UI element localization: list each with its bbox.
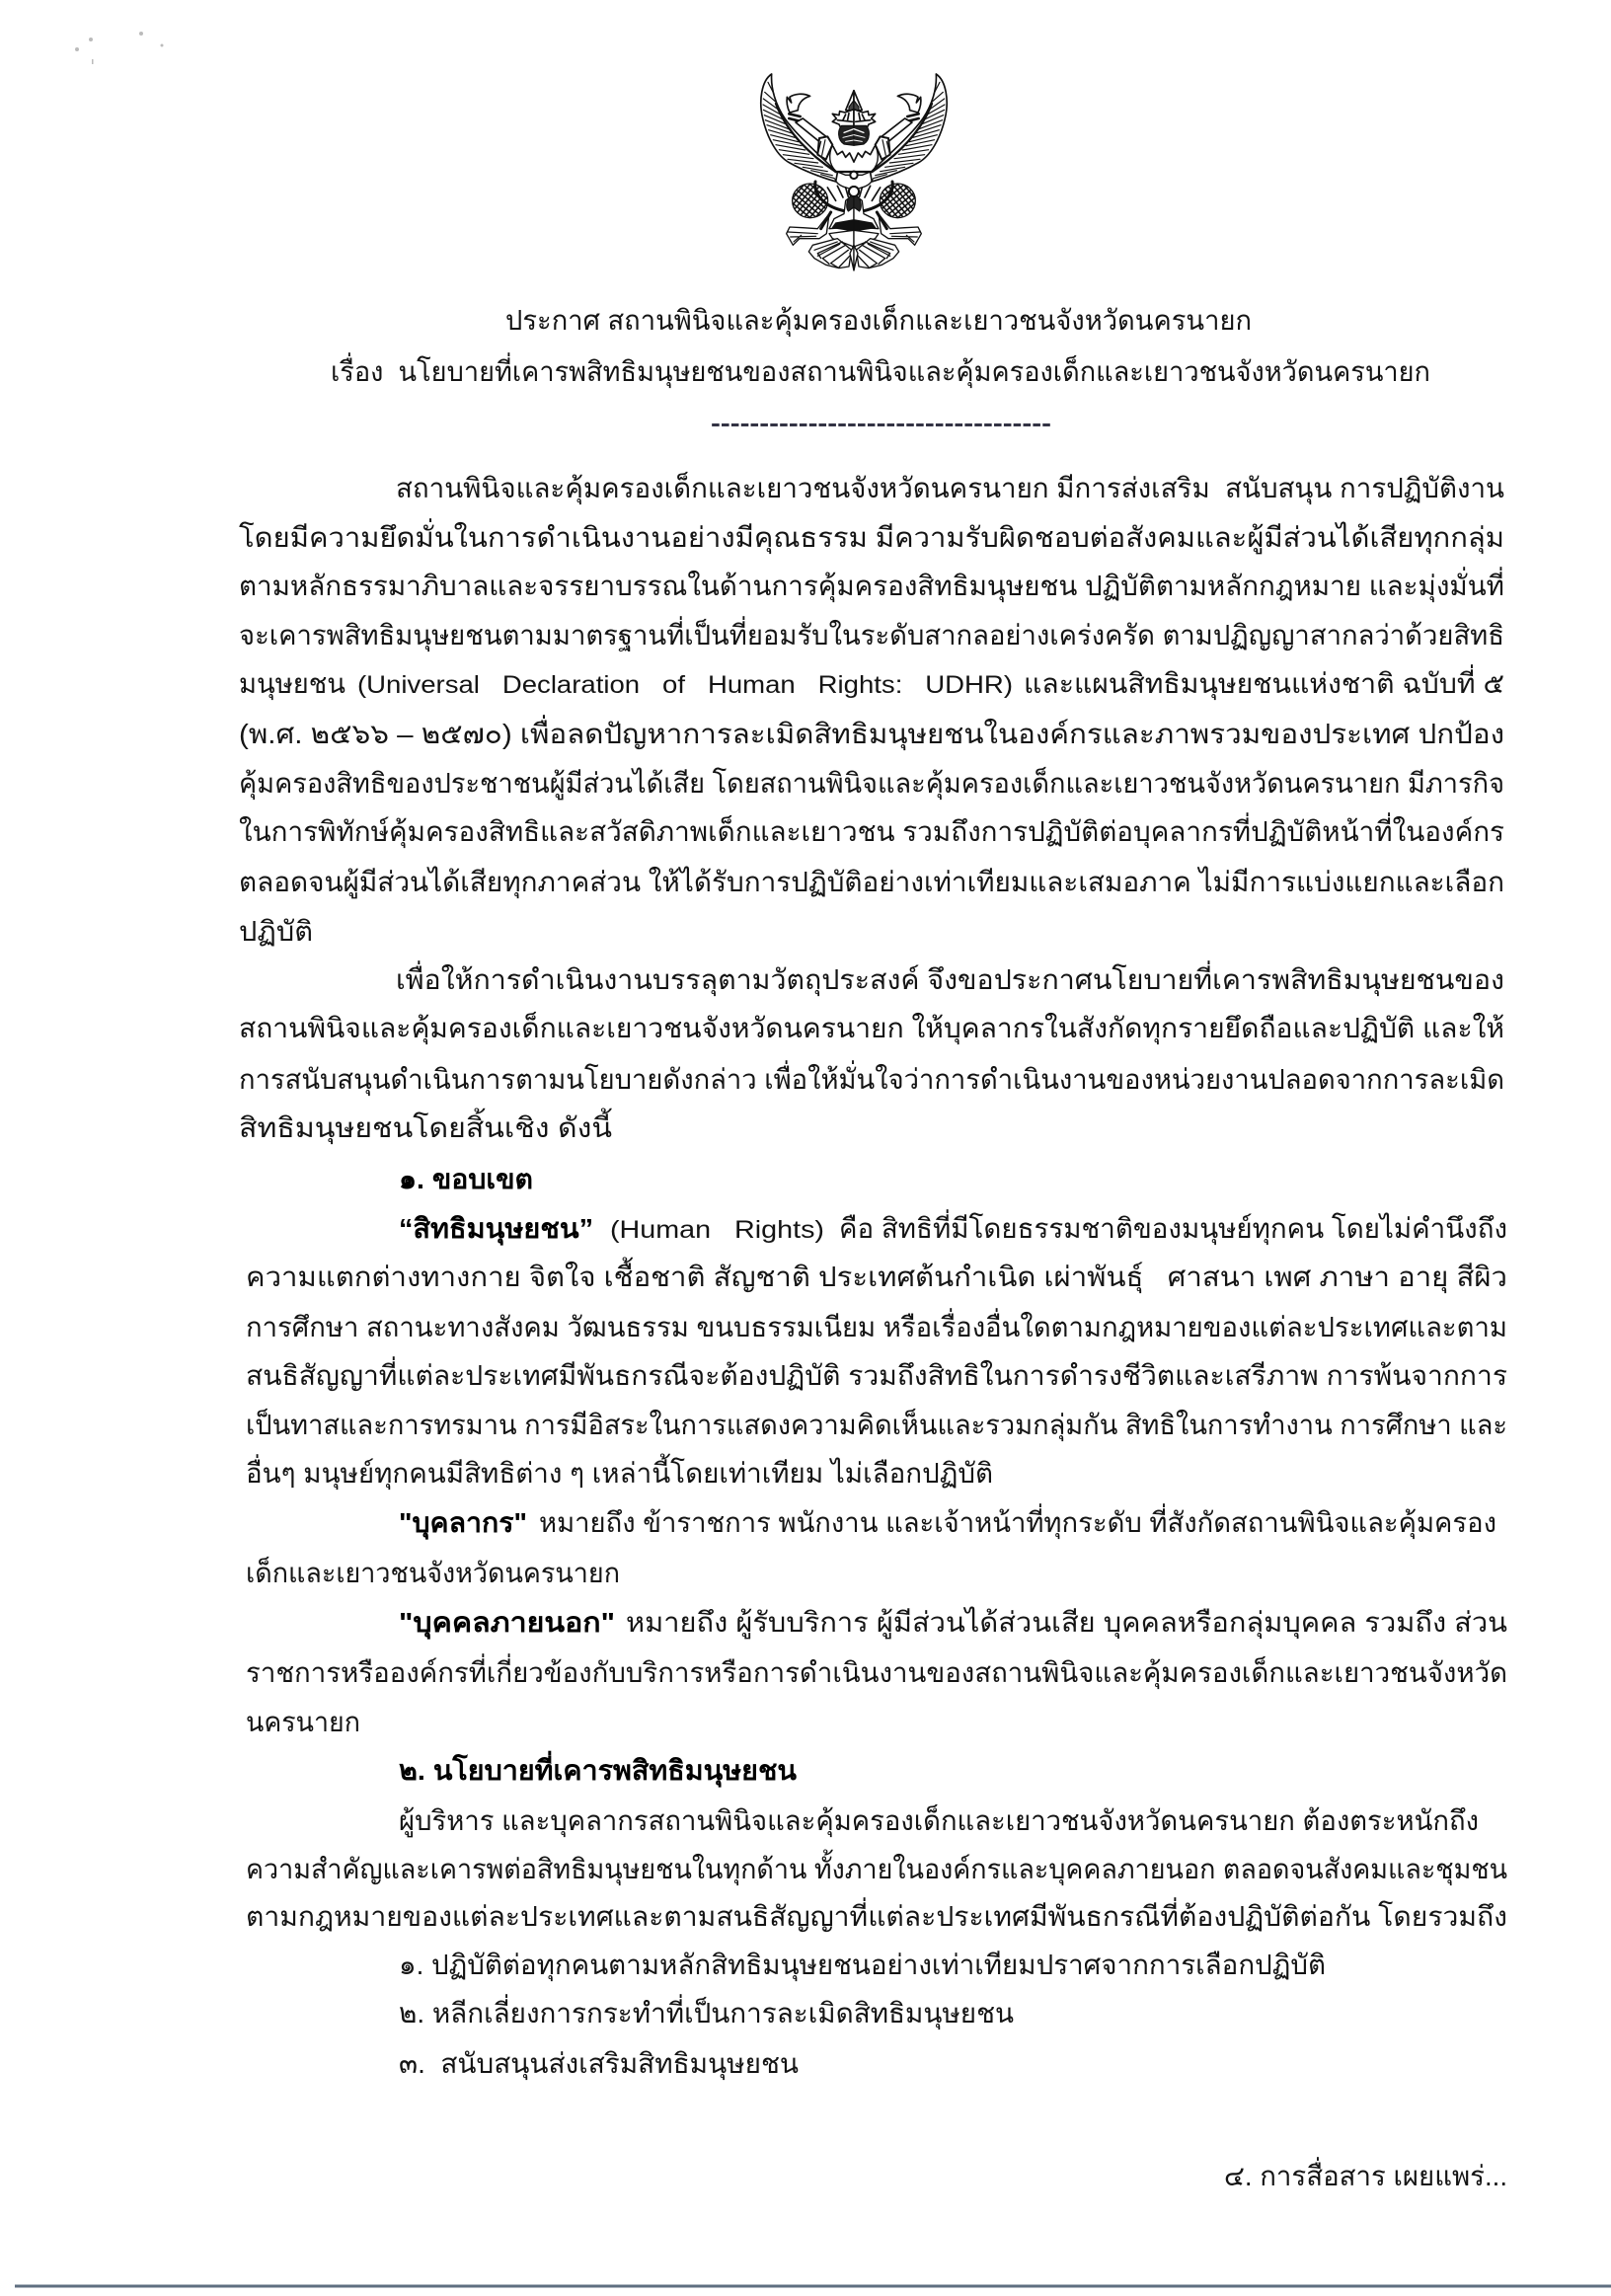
text block: definition of human rights: คือ สิทธิที่มีโดยธรรมชาติของมนุษย์ทุกคน โดยไม่คำนึงถึง [839, 1209, 1507, 1246]
text block: opening paragraph [239, 471, 1504, 947]
list: policy items: ๑. ปฏิบัติต่อทุกคนตามหลักสิทธิมนุษยชนอย่างเท่าเทียมปราศจากการเลือกปฏิบัติ [399, 1950, 1326, 1982]
text block: opening paragraph: และแผนสิทธิมนุษยชนแห่งชาติ ฉบับที่ ๕ [1024, 664, 1504, 701]
text block: definition of human rights: “สิทธิมนุษยชน” [399, 1213, 593, 1246]
text block: definition of outsiders: "บุคคลภายนอก" [399, 1607, 615, 1640]
text block: purpose paragraph [239, 960, 1504, 1145]
title: เรื่อง นโยบายที่เคารพสิทธิมนุษยชนของสถานพินิจและคุ้มครองเด็กและเยาวชนจังหวัดนครนายก [331, 352, 1430, 389]
text block: definition of personnel [246, 1503, 1496, 1588]
list: policy items: ๓. สนับสนุนส่งเสริมสิทธิมนุษยชน [399, 2048, 799, 2081]
text block: purpose paragraph: สถานพินิจและคุ้มครองเด็กและเยาวชนจังหวัดนครนายก ให้บุคลากรในสังกัดทุกรายยึดถือและปฏิบัติ และให้ [239, 1011, 1504, 1045]
text block: opening paragraph: (พ.ศ. ๒๕๖๖ – ๒๕๗๐) เพื่อลดปัญหาการละเมิดสิทธิมนุษยชนในองค์กรและภาพรวมของประเทศ ปกป้อง [239, 715, 1504, 751]
text block: definition of human rights: การศึกษา สถานะทางสังคม วัฒนธรรม ขนบธรรมเนียม หรือเรื่องอื่นใดตามกฎหมายของแต่ละประเทศและตาม [246, 1308, 1507, 1342]
text block: policy statement: ความสำคัญและเคารพต่อสิทธิมนุษยชนในทุกด้าน ทั้งภายในองค์กรและบุคคลภายนอก ตลอดจนสังคมและชุมชน [246, 1849, 1507, 1886]
icon: Thai Garuda emblem [761, 74, 947, 270]
title: ประกาศ สถานพินิจและคุ้มครองเด็กและเยาวชนจังหวัดนครนายก [505, 303, 1252, 338]
text block: opening paragraph: สถานพินิจและคุ้มครองเด็กและเยาวชนจังหวัดนครนายก มีการส่งเสริม สนับสนุน การปฏิบัติงาน [396, 471, 1504, 505]
continuation note: ๔. การสื่อสาร เผยแพร่... [1224, 2157, 1507, 2191]
text block: policy statement [246, 1803, 1507, 1932]
text block: definition of outsiders: นครนายก [246, 1707, 360, 1737]
text block: policy statement: ผู้บริหาร และบุคลากรสถานพินิจและคุ้มครองเด็กและเยาวชนจังหวัดนครนายก ต้องตระหนักถึง [399, 1803, 1479, 1838]
text block: definition of human rights: เป็นทาสและการทรมาน การมีอิสระในการแสดงความคิดเห็นและรวมกลุ่มกัน สิทธิในการทำงาน การศึกษา และ [246, 1408, 1507, 1442]
text block: definition of human rights: สนธิสัญญาที่แต่ละประเทศมีพันธกรณีจะต้องปฏิบัติ รวมถึงสิทธิในการดำรงชีวิตและเสรีภาพ การพ้นจากการ [246, 1356, 1507, 1391]
text block: definition of personnel: "บุคลากร" [399, 1507, 527, 1540]
title [331, 303, 1430, 389]
text block: opening paragraph: คุ้มครองสิทธิของประชาชนผู้มีส่วนได้เสีย โดยสถานพินิจและคุ้มครองเด็กและเยาวชนจังหวัดนครนายก มีภารกิจ [239, 766, 1504, 801]
text block: purpose paragraph: เพื่อให้การดำเนินงานบรรลุตามวัตถุประสงค์ จึงขอประกาศนโยบายที่เคารพสิทธิมนุษยชนของ [396, 960, 1504, 997]
text block: opening paragraph: โดยมีความยึดมั่นในการดำเนินงานอย่างมีคุณธรรม มีความรับผิดชอบต่อสังคมและผู้มีส่วนได้เสียทุกกลุ่ม [239, 518, 1504, 555]
text block: definition of human rights: (Human Rights) [610, 1216, 824, 1244]
text block: opening paragraph: ตลอดจนผู้มีส่วนได้เสียทุกภาคส่วน ให้ได้รับการปฏิบัติอย่างเท่าเทียมและเสมอภาค ไม่มีการแบ่งแยกและเลือก [239, 866, 1504, 899]
text block: definition of outsiders: หมายถึง ผู้รับบริการ ผู้มีส่วนได้ส่วนเสีย บุคคลหรือกลุ่มบุคคล รวมถึง ส่วน [626, 1607, 1507, 1640]
text block: definition of human rights: อื่นๆ มนุษย์ทุกคนมีสิทธิต่าง ๆ เหล่านี้โดยเท่าเทียม ไม่เลือกปฏิบัติ [246, 1453, 993, 1491]
text block: definition of human rights: ความแตกต่างทางกาย จิตใจ เชื้อชาติ สัญชาติ ประเทศต้นกำเนิด เผ่าพันธุ์ ศาสนา เพศ ภาษา อายุ สีผิว [246, 1257, 1507, 1294]
divider dashes: ----------------------------------- [711, 410, 1051, 437]
text block: opening paragraph: มนุษยชน [239, 668, 345, 701]
text block: opening paragraph: ตามหลักธรรมาภิบาลและจรรยาบรรณในด้านการคุ้มครองสิทธิมนุษยชน ปฏิบัติตามหลักกฎหมาย และมุ่งมั่นที่ [239, 567, 1504, 603]
text block: opening paragraph: (Universal Declaration of Human Rights: UDHR) [357, 671, 1013, 699]
text block: opening paragraph: ปฏิบัติ [239, 916, 313, 947]
list: policy items: ๒. หลีกเลี่ยงการกระทำที่เป็นการละเมิดสิทธิมนุษยชน [399, 1994, 1014, 2030]
heading: section 1: ๑. ขอบเขต [399, 1164, 533, 1194]
text block: definition of outsiders [246, 1607, 1507, 1737]
text block: definition of outsiders: ราชการหรือองค์กรที่เกี่ยวข้องกับบริการหรือการดำเนินงานของสถานพินิจและคุ้มครองเด็กและเยาวชนจังหวัด [246, 1653, 1507, 1690]
text block: definition of personnel: เด็กและเยาวชนจังหวัดนครนายก [246, 1556, 620, 1588]
text block: purpose paragraph: สิทธิมนุษยชนโดยสิ้นเชิง ดังนี้ [239, 1108, 612, 1145]
text block: purpose paragraph: การสนับสนุนดำเนินการตามนโยบายดังกล่าว เพื่อให้มั่นใจว่าการดำเนินงานของหน่วยงานปลอดจากการละเมิด [239, 1060, 1504, 1097]
text block: opening paragraph: จะเคารพสิทธิมนุษยชนตามมาตรฐานที่เป็นที่ยอมรับในระดับสากลอย่างเคร่งครัด ตามปฏิญญาสากลว่าด้วยสิทธิ [239, 616, 1504, 652]
text block: opening paragraph: ในการพิทักษ์คุ้มครองสิทธิและสวัสดิภาพเด็กและเยาวชน รวมถึงการปฏิบัติต่อบุคลากรที่ปฏิบัติหน้าที่ในองค์กร [239, 812, 1504, 849]
heading: section 2: ๒. นโยบายที่เคารพสิทธิมนุษยชน [399, 1750, 797, 1788]
list: policy items [399, 1950, 1326, 2081]
text block: policy statement: ตามกฎหมายของแต่ละประเทศและตามสนธิสัญญาที่แต่ละประเทศมีพันธกรณีที่ต้องปฏิบัติต่อกัน โดยรวมถึง [246, 1897, 1507, 1932]
text block: definition of human rights [246, 1209, 1507, 1491]
text block: definition of personnel: หมายถึง ข้าราชการ พนักงาน และเจ้าหน้าที่ทุกระดับ ที่สังกัดสถานพินิจและคุ้มครอง [539, 1503, 1496, 1540]
